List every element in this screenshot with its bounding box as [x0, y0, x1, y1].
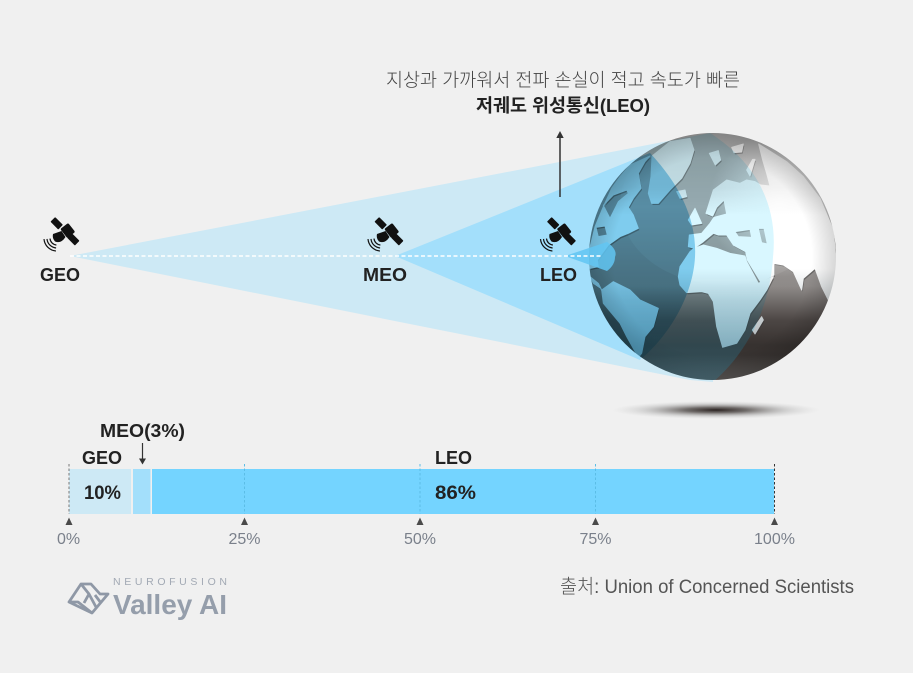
axis markers — [66, 518, 778, 525]
callout text: 지상과 가까워서 전파 손실이 적고 속도가 빠른 — [386, 70, 740, 90]
label: MEO: MEO — [363, 265, 407, 285]
axis labels: 25% — [228, 531, 261, 548]
logo — [69, 576, 227, 620]
icon: GEO satellite — [44, 217, 80, 251]
bar label: GEO: GEO — [82, 448, 122, 468]
globe shadow — [612, 401, 820, 419]
axis labels — [57, 531, 795, 548]
blue tint on lower globe — [598, 303, 763, 380]
callout text: 저궤도 위성통신(LEO) — [476, 95, 650, 116]
icon: MEO satellite — [368, 217, 404, 251]
arrow: up to callout — [556, 131, 564, 197]
axis labels: 50% — [404, 531, 436, 548]
logo name: Valley AI — [113, 589, 227, 620]
infographic — [40, 70, 854, 620]
MEO coverage beam — [395, 153, 695, 360]
MEO lens on globe — [589, 153, 696, 358]
label: LEO: LEO — [540, 265, 577, 285]
GEO lens on globe — [590, 133, 774, 380]
axis labels: 100% — [754, 531, 795, 548]
bar value: GEO 10%: 10% — [84, 483, 121, 504]
axis labels: 0% — [57, 531, 80, 548]
label: GEO: GEO — [40, 265, 80, 285]
arrow: down to MEO segment — [139, 443, 146, 464]
globe — [589, 133, 836, 380]
axis labels: 75% — [579, 531, 612, 548]
source: 출처: Union of Concerned Scientists — [560, 576, 854, 598]
bar label: LEO: LEO — [435, 448, 472, 468]
bar label: MEO 3%: MEO(3%) — [100, 421, 185, 441]
logo mark — [69, 584, 108, 613]
LEO coverage beam — [565, 242, 616, 271]
GEO coverage beam — [70, 133, 713, 382]
callout text — [386, 70, 740, 116]
logo small text: NEUROFUSION — [113, 576, 227, 588]
icon: LEO satellite — [540, 217, 576, 251]
bar value: LEO 86%: 86% — [435, 483, 476, 504]
stacked bar chart — [69, 464, 774, 514]
signal centre line — [70, 255, 602, 257]
